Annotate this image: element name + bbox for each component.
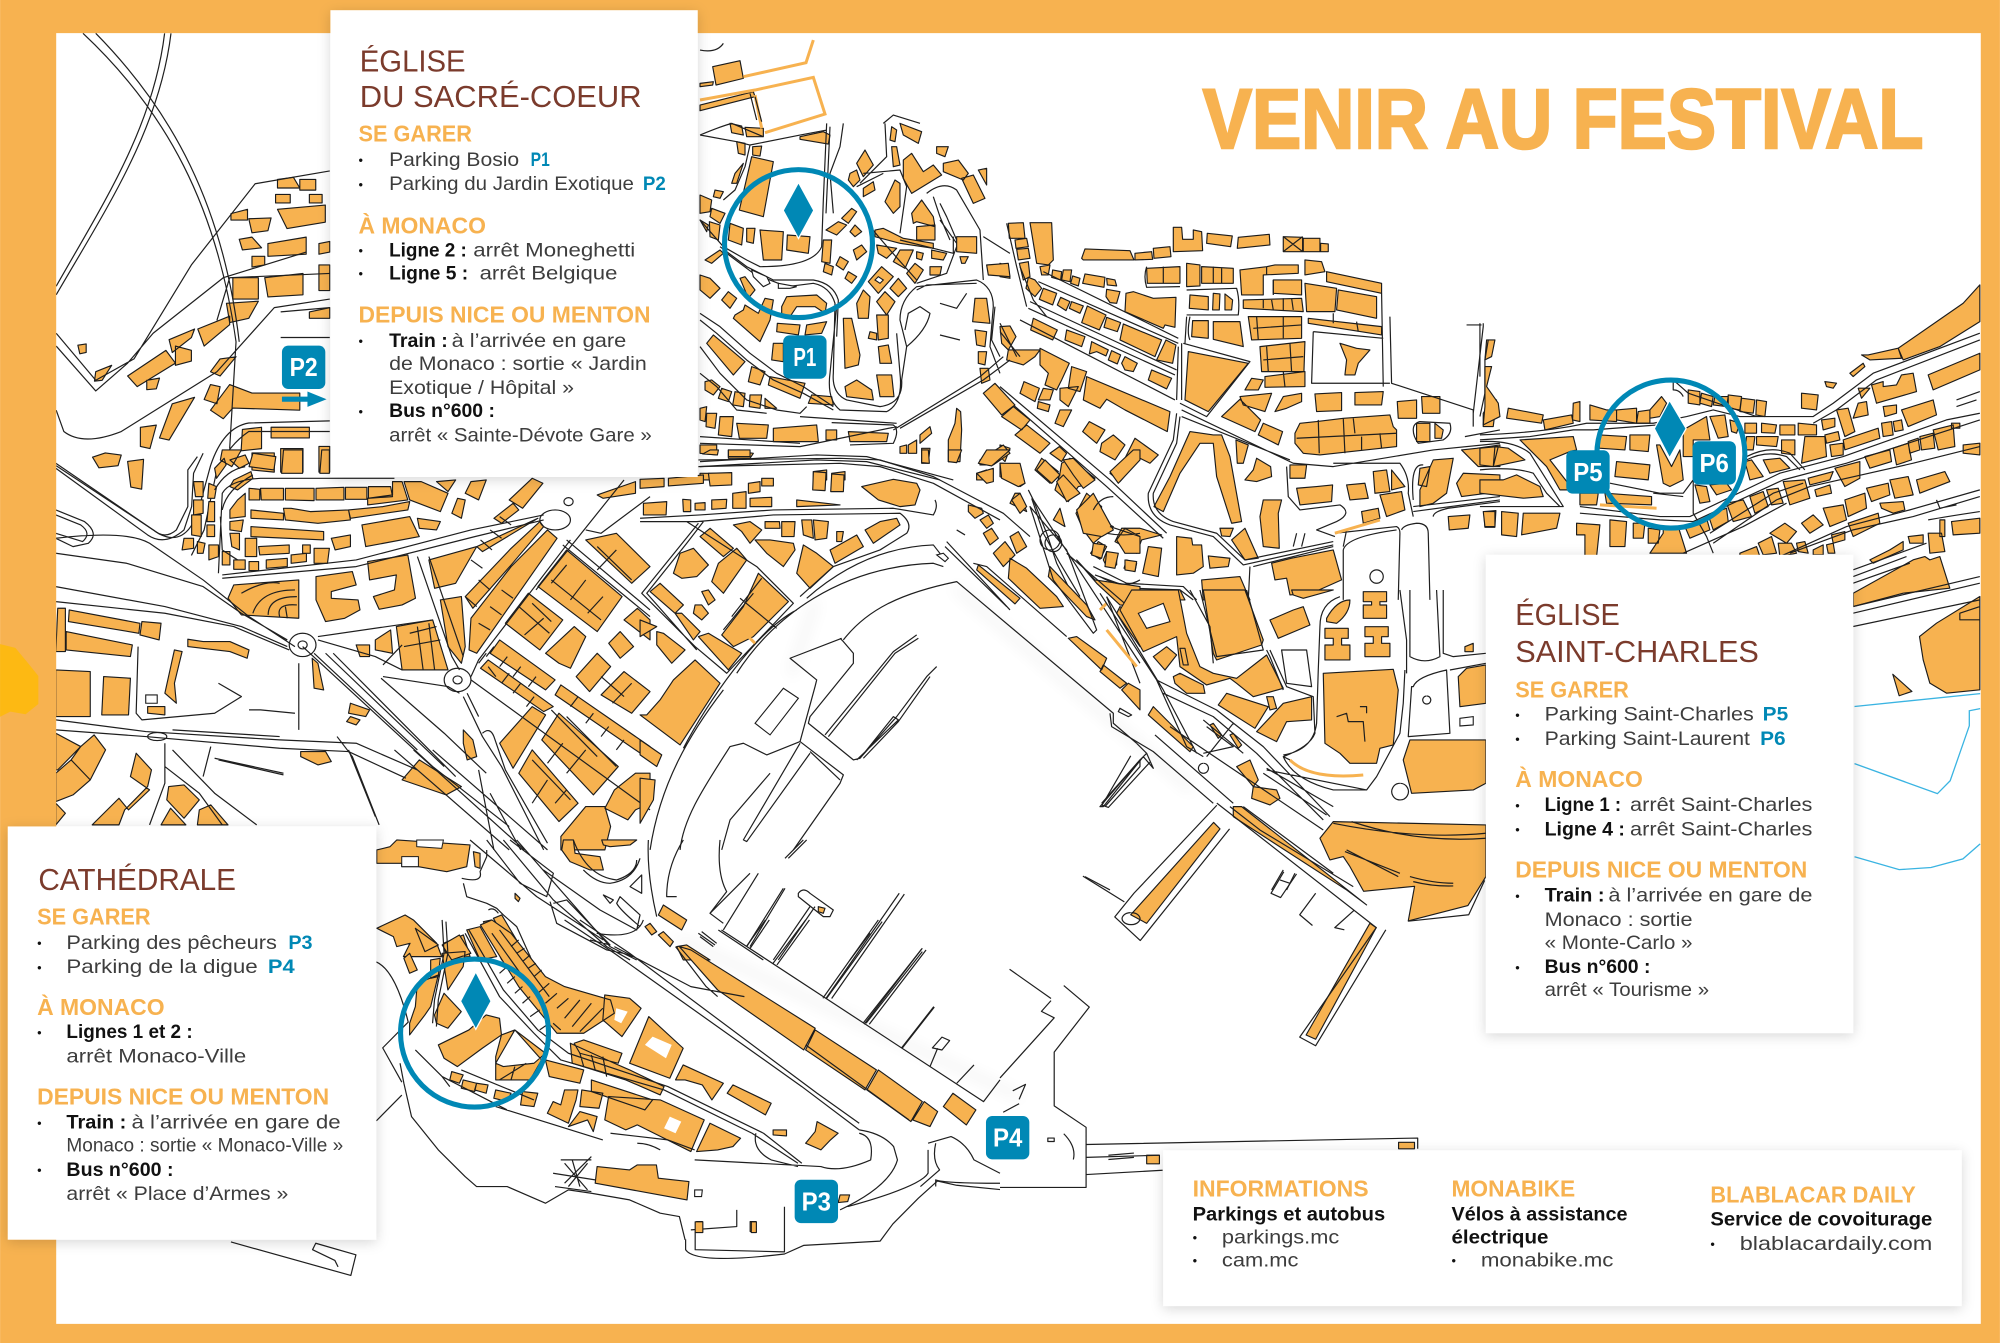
panel: Église Saint-Charles <box>1486 555 1853 1033</box>
heading: SAINT-CHARLES <box>1515 635 1759 669</box>
parking badge P5 <box>1566 450 1610 494</box>
location circle: Sacré-Coeur <box>725 170 872 318</box>
section: à Monaco: • <box>1515 822 1520 837</box>
section: depuis Nice ou Menton: DEPUIS NICE OU MENTON <box>37 1083 329 1109</box>
section: se garer: P2 <box>643 174 666 195</box>
section: se garer <box>37 904 313 978</box>
section: se garer <box>1515 677 1789 750</box>
section: à Monaco: • <box>358 266 363 281</box>
section: depuis Nice ou Menton: Monaco : sortie <box>1545 910 1693 931</box>
section: à Monaco: arrêt Moneghetti <box>473 240 635 261</box>
column: Monabike <box>1451 1175 1627 1271</box>
section: se garer: P4 <box>268 957 295 978</box>
heading <box>1515 597 1759 669</box>
section: depuis Nice ou Menton: « Monte-Carlo » <box>1545 933 1693 954</box>
map section: Rock coastline and Fontvieille pier <box>231 893 1000 1275</box>
section: à Monaco <box>1515 766 1812 840</box>
column: informations: • <box>1193 1230 1197 1245</box>
section: depuis Nice ou Menton: • <box>358 404 363 419</box>
section: à Monaco: arrêt Saint-Charles <box>1630 795 1812 816</box>
section: se garer: • <box>358 153 363 168</box>
column: informations: parkings.mc <box>1222 1228 1340 1249</box>
section: se garer: P5 <box>1763 705 1789 726</box>
parking badge P6 <box>1693 441 1736 485</box>
section: se garer: SE GARER <box>1515 677 1629 703</box>
heading <box>360 43 642 114</box>
section: se garer: • <box>1515 732 1520 747</box>
parking badge P4: P4 <box>993 1125 1023 1153</box>
section: depuis Nice ou Menton: Exotique / Hôpital » <box>389 378 574 399</box>
section: à Monaco: • <box>358 243 363 258</box>
section: depuis Nice ou Menton: Bus n°600 : <box>1545 957 1650 978</box>
section: depuis Nice ou Menton: • <box>37 1163 42 1178</box>
map section: Sacré-Coeur district <box>700 40 1015 480</box>
section: depuis Nice ou Menton: à l’arrivée en gare de <box>131 1113 341 1134</box>
parking badge P3: P3 <box>802 1188 831 1216</box>
section: se garer: Parking Saint-Laurent <box>1545 729 1751 750</box>
section: depuis Nice ou Menton: à l’arrivée en gare <box>452 331 626 352</box>
column: Monabike: monabike.mc <box>1481 1250 1614 1271</box>
section: depuis Nice ou Menton: Train : <box>66 1113 126 1134</box>
section: depuis Nice ou Menton: Bus n°600 : <box>66 1160 174 1181</box>
panel: informations <box>1163 1150 1962 1306</box>
section: depuis Nice ou Menton: arrêt « Place d’Armes » <box>66 1184 288 1205</box>
section: à Monaco: Ligne 5 : <box>389 263 468 284</box>
section: se garer: Parking de la digue <box>66 957 258 978</box>
panel: Église du Sacré-Coeur <box>330 10 698 477</box>
parking badge P5: P5 <box>1573 459 1603 487</box>
section: à Monaco: • <box>1515 798 1520 813</box>
section: se garer: • <box>358 177 363 192</box>
column: informations <box>1193 1175 1385 1271</box>
column: BlaBlaCar Daily: blablacardaily.com <box>1740 1234 1932 1255</box>
section: se garer: P3 <box>288 933 313 954</box>
parking badge P3 <box>795 1180 838 1223</box>
section: se garer: Parking des pêcheurs <box>66 933 277 954</box>
section: se garer: SE GARER <box>358 121 472 147</box>
parking badge P1: P1 <box>793 344 816 372</box>
column: informations: • <box>1193 1253 1197 1268</box>
section: se garer <box>358 121 666 195</box>
parking badge P4 <box>986 1116 1029 1159</box>
map section: Monte-Carlo waterfront <box>1000 670 1980 1187</box>
parking badge P6: P6 <box>1700 450 1729 478</box>
heading: CATHÉDRALE <box>38 862 236 897</box>
section: à Monaco: arrêt Saint-Charles <box>1630 819 1812 840</box>
section: depuis Nice ou Menton: • <box>37 1115 42 1130</box>
section: se garer: • <box>37 936 42 951</box>
map section: Fontvieille side and Rock <box>400 920 1000 1240</box>
section: depuis Nice ou Menton <box>358 302 652 446</box>
panel: Cathédrale <box>8 826 376 1240</box>
location circle: Cathédrale <box>401 959 549 1107</box>
section: depuis Nice ou Menton: Bus n°600 : <box>389 401 495 422</box>
section: se garer: P6 <box>1760 729 1786 750</box>
map section: west districts and Condamine <box>56 450 650 850</box>
parking badge P1 <box>783 335 827 379</box>
section: depuis Nice ou Menton: de Monaco : sortie « Jardin <box>389 354 647 375</box>
section: se garer: Parking Bosio <box>389 150 519 171</box>
section: se garer: • <box>37 960 42 975</box>
map section: palace foot and railway junction <box>377 840 870 960</box>
column: Monabike: MONABIKE <box>1451 1175 1575 1201</box>
section: à Monaco <box>358 212 635 284</box>
section: depuis Nice ou Menton: Monaco : sortie « Monaco-Ville » <box>66 1136 343 1157</box>
column: informations: Parkings et autobus <box>1193 1205 1385 1226</box>
parking badge P2: P2 <box>290 354 318 382</box>
heading: ÉGLISE <box>360 43 466 78</box>
section: se garer: Parking du Jardin Exotique <box>389 174 634 195</box>
map section: Saint-Charles and east Monte-Carlo <box>1480 285 1980 693</box>
column: informations: INFORMATIONS <box>1193 1175 1369 1201</box>
column: BlaBlaCar Daily: • <box>1710 1237 1715 1252</box>
column: BlaBlaCar Daily: BLABLACAR DAILY <box>1710 1182 1916 1208</box>
section: à Monaco: Ligne 1 : <box>1545 795 1621 816</box>
column: BlaBlaCar Daily <box>1710 1182 1932 1255</box>
section: depuis Nice ou Menton <box>1515 856 1812 1001</box>
location circle: Saint-Charles <box>1597 380 1745 528</box>
section: depuis Nice ou Menton: à l’arrivée en gare de <box>1608 886 1812 907</box>
section: depuis Nice ou Menton: • <box>1515 960 1520 975</box>
map section: north-east district <box>1000 223 1500 600</box>
section: depuis Nice ou Menton: arrêt « Tourisme » <box>1545 980 1709 1001</box>
column: informations: cam.mc <box>1222 1250 1299 1271</box>
section: depuis Nice ou Menton: arrêt « Sainte-Dévote Gare » <box>389 425 652 446</box>
map section: Port Hercule buildings and quays <box>640 450 1140 850</box>
section: depuis Nice ou Menton <box>37 1083 343 1205</box>
section: à Monaco: Lignes 1 et 2 : <box>66 1022 193 1043</box>
arrow under P2 <box>282 392 327 407</box>
section: à Monaco: arrêt Belgique <box>480 263 617 284</box>
section: à Monaco: À MONACO <box>37 994 165 1020</box>
map section: Larvotto side lower district <box>1085 590 1486 921</box>
section: depuis Nice ou Menton: DEPUIS NICE OU MENTON <box>1515 856 1807 882</box>
column: BlaBlaCar Daily: Service de covoiturage <box>1710 1210 1932 1231</box>
column: Monabike: Vélos à assistance <box>1451 1205 1627 1226</box>
section: à Monaco: Ligne 4 : <box>1545 819 1625 840</box>
soft coast shadow <box>676 587 1193 1097</box>
left edge yellow smudge <box>0 644 38 717</box>
section: depuis Nice ou Menton: Train : <box>1545 886 1605 907</box>
heading: ÉGLISE <box>1515 597 1620 632</box>
section: à Monaco: À MONACO <box>1515 766 1643 792</box>
section: se garer: P1 <box>531 150 550 171</box>
section: se garer: SE GARER <box>37 904 151 930</box>
section: à Monaco <box>37 994 246 1067</box>
section: depuis Nice ou Menton: • <box>358 334 363 349</box>
column: Monabike: • <box>1451 1253 1456 1268</box>
parking badge P2 <box>282 346 325 389</box>
section: à Monaco: • <box>37 1025 42 1040</box>
section: se garer: • <box>1515 707 1520 722</box>
section: à Monaco: Ligne 2 : <box>389 240 467 261</box>
column: Monabike: électrique <box>1451 1228 1548 1249</box>
map section: upper-west hillside <box>56 33 330 555</box>
section: depuis Nice ou Menton: DEPUIS NICE OU MENTON <box>358 302 651 328</box>
section: à Monaco: arrêt Monaco-Ville <box>66 1046 246 1067</box>
heading: DU SACRÉ-COEUR <box>360 79 642 114</box>
section: se garer: Parking Saint-Charles <box>1545 705 1754 726</box>
section: à Monaco: À MONACO <box>358 212 486 238</box>
section: depuis Nice ou Menton: • <box>1515 888 1520 903</box>
section: depuis Nice ou Menton: Train : <box>389 331 448 352</box>
